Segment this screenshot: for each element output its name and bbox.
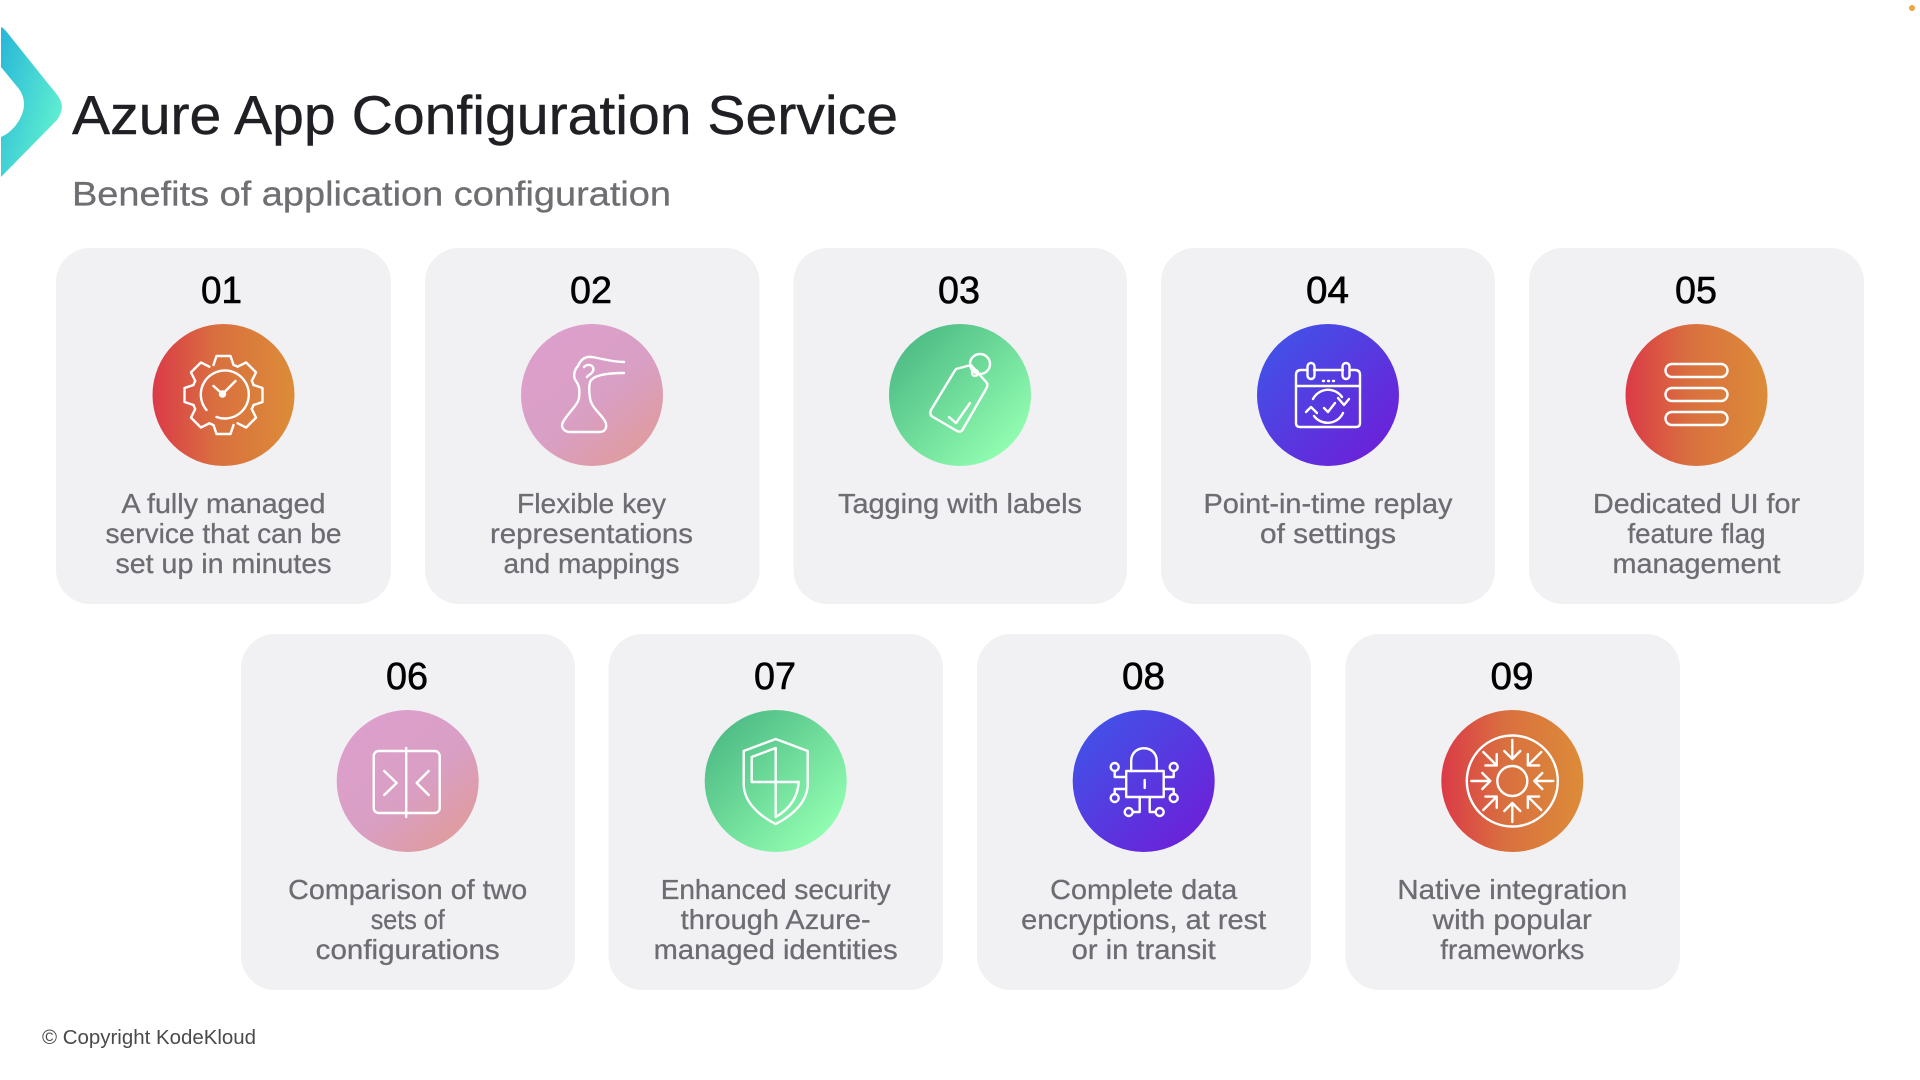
number 03: 03 [938,270,980,312]
icon: arrows converging on a circle [1441,710,1583,852]
description 09: frameworks [1440,934,1584,965]
panel: card 09 [1346,634,1680,990]
number 08: 08 [1122,656,1165,698]
description 07: Enhanced security [661,874,891,905]
description 04: Point-in-time replay [1204,488,1452,519]
description 08: or in transit [1072,934,1216,965]
panel: card 03 [794,248,1127,604]
panel: card 01 [56,248,391,604]
description 01: service that can be [106,518,342,549]
description 03: Tagging with labels [838,488,1082,519]
copyright footer: © Copyright KodeKloud [42,1027,256,1049]
number 05: 05 [1675,270,1717,312]
description 02: representations [490,518,693,549]
description 07: through Azure- [681,904,871,935]
icon: gear with clock [152,324,294,466]
panel: card 05 [1529,248,1864,604]
panel: card 06 [241,634,575,990]
description 04 [1204,488,1452,549]
description 05: feature flag [1628,518,1766,549]
description 05: Dedicated UI for [1593,488,1800,519]
orange status dot [1909,5,1915,11]
description 09: with popular [1432,904,1592,935]
icon: split comparison panel [337,710,479,852]
icon: tag with check [889,324,1031,466]
description 09: Native integration [1397,874,1627,905]
description 06 [288,874,527,965]
description 01 [106,488,342,579]
icon: chevron logo [1,27,62,177]
subtitle: Benefits of application configuration [72,176,671,214]
description 06: Comparison of two [288,874,527,905]
description 01: set up in minutes [116,548,332,579]
description 07: managed identities [654,934,898,965]
icon: calendar with replay arrows [1257,324,1399,466]
title: Azure App Configuration Service [72,84,898,146]
icon: hand holding flask [521,324,663,466]
panel: card 08 [977,634,1311,990]
icon: three stacked bars [1626,324,1768,466]
icon: padlock with circuit [1073,710,1215,852]
description 02: and mappings [504,548,680,579]
description 09 [1397,874,1627,965]
panel: card 04 [1161,248,1495,604]
number 06: 06 [386,656,428,698]
icon: shield [705,710,847,852]
number 09: 09 [1490,656,1534,698]
description 08 [1021,874,1266,965]
number 01: 01 [201,270,242,312]
description 08: Complete data [1050,874,1238,905]
description 05: management [1612,548,1781,579]
number 02: 02 [570,270,612,312]
description 02: Flexible key [517,488,666,519]
description 02 [490,488,693,579]
number 04: 04 [1306,270,1349,312]
description 01: A fully managed [122,488,326,519]
number 07: 07 [754,656,796,698]
description 06: sets of [371,904,445,935]
panel: card 02 [425,248,760,604]
panel: card 07 [608,634,943,990]
description 05 [1593,488,1800,579]
description 04: of settings [1260,518,1396,549]
description 08: encryptions, at rest [1021,904,1266,935]
description 07 [654,874,898,965]
description 06: configurations [316,934,500,965]
